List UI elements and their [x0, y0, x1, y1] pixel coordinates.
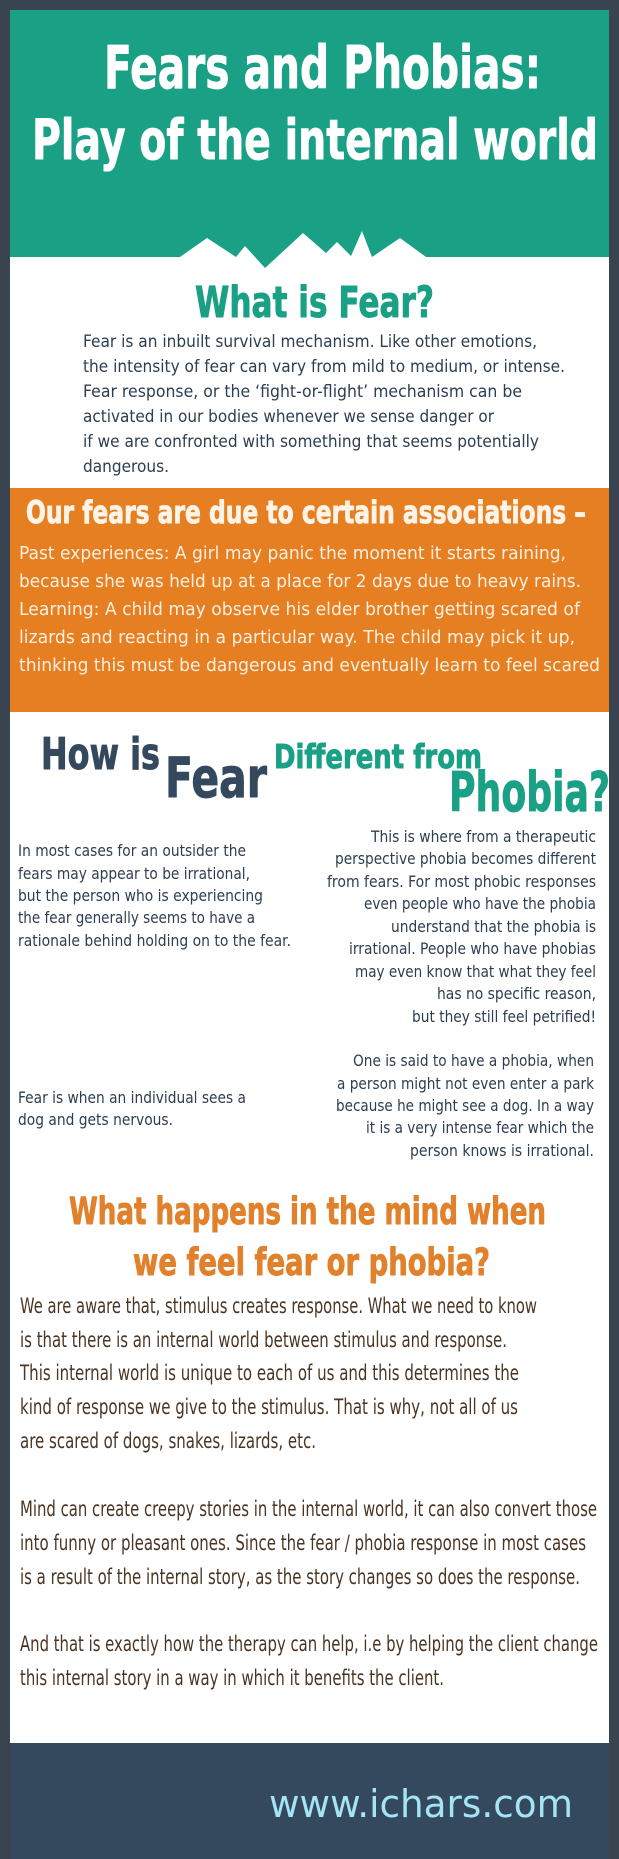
heading: what happens in the mind — [69, 1190, 546, 1284]
icon: mountain skyline — [180, 231, 426, 268]
text block: fear column 1: rationale behind holding on to the fear. — [18, 931, 291, 950]
text block: associations: because she was held up at a place for 2 days due to heavy rains. — [19, 571, 581, 592]
text block: fear column 1: fears may appear to be irrational, — [18, 864, 250, 883]
panel: footer — [10, 1743, 609, 1859]
footer website link: www.ichars.com — [269, 1782, 573, 1826]
text block: what is fear: Fear response, or the ‘fight-or-flight’ mechanism can be — [83, 382, 522, 402]
text block: fear column 1: but the person who is experiencing — [18, 886, 263, 905]
text block: associations: thinking this must be dangerous and eventually learn to feel scared — [19, 655, 600, 676]
text block: associations — [19, 543, 600, 676]
text block: fear column 1 — [18, 841, 291, 950]
heading: Different from Phobia?: Different from — [274, 737, 482, 776]
heading: What is Fear?: What is Fear? — [195, 278, 434, 328]
panel: associations — [10, 488, 609, 712]
text block: phobia column 1 — [327, 827, 596, 1026]
heading: How is Fear: Fear — [165, 746, 267, 810]
text block: what is fear: Fear is an inbuilt survival mechanism. Like other emotions, — [83, 332, 537, 352]
text block: phobia column 2 — [336, 1051, 595, 1160]
text block: internal world: are scared of dogs, snakes, lizards, etc. — [20, 1429, 316, 1453]
text block: what is fear: activated in our bodies whenever we sense danger or — [83, 407, 494, 427]
text block: phobia column 2: person knows is irrational. — [410, 1141, 594, 1160]
heading: Different from Phobia? — [274, 737, 610, 824]
text block: what is fear — [83, 332, 565, 477]
text block: fear column 2: Fear is when an individual sees a — [18, 1088, 246, 1107]
text block: fear column 2 — [18, 1088, 246, 1129]
heading: How is Fear: How is — [41, 729, 160, 780]
header panel — [10, 10, 609, 257]
text block: fear column 1: the fear generally seems to have a — [18, 908, 255, 927]
text block: associations: lizards and reacting in a particular way. The child may pick it up, — [19, 627, 575, 648]
text block: internal world: this internal story in a way in which it benefits the client. — [20, 1666, 444, 1690]
heading: what happens in the mind: we feel fear or phobia? — [133, 1241, 490, 1284]
text block: fear column 2: dog and gets nervous. — [18, 1110, 173, 1129]
text block: what is fear: dangerous. — [83, 457, 169, 477]
text block: what is fear: if we are confronted with something that seems potentially — [83, 432, 539, 452]
text block: associations: Learning: A child may observe his elder brother getting scared of — [19, 599, 581, 620]
text block: fear column 1: In most cases for an outsider the — [18, 841, 246, 860]
text block: internal world — [19, 1294, 598, 1690]
heading: How is Fear — [41, 729, 267, 810]
text block: associations: Past experiences: A girl may panic the moment it starts raining, — [19, 543, 566, 564]
text block: phobia column 1: has no specific reason, — [437, 984, 596, 1003]
text block: what is fear: the intensity of fear can vary from mild to medium, or intense. — [83, 357, 565, 377]
title — [32, 33, 598, 172]
